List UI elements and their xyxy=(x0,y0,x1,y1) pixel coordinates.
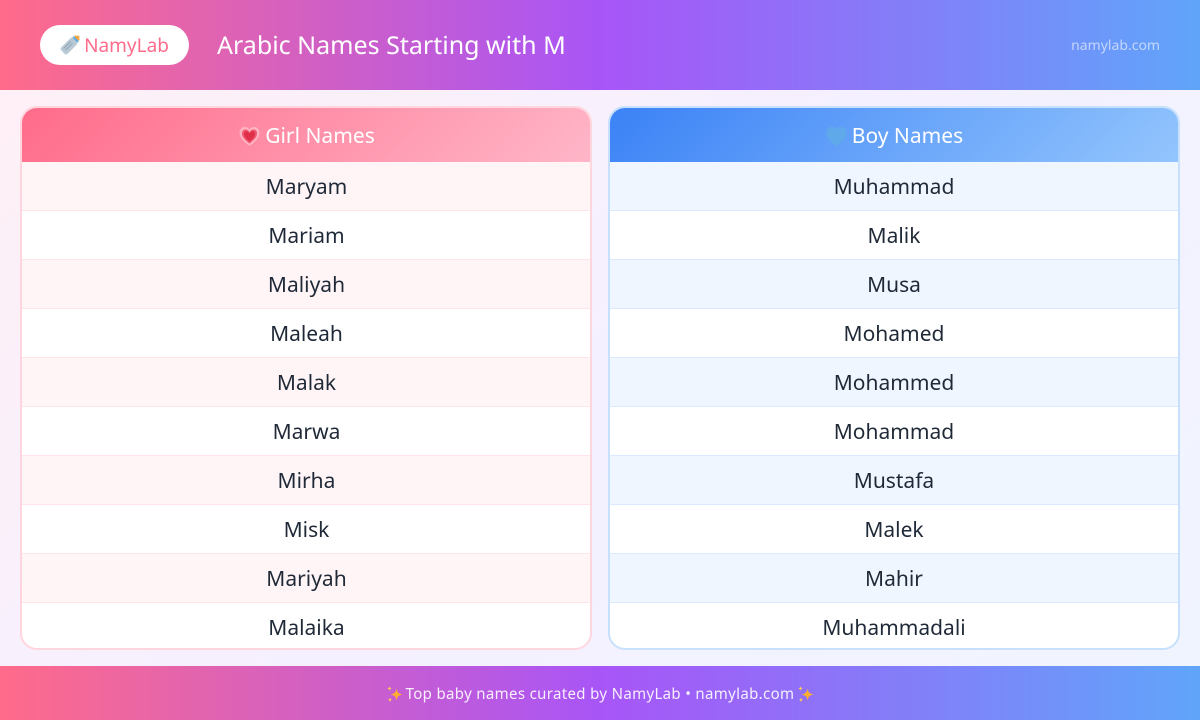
name row: Mariyah xyxy=(22,554,590,603)
name row: Malik: Malik xyxy=(868,222,920,250)
name row: Musa xyxy=(610,260,1178,309)
name row: Mohamed: Mohamed xyxy=(844,320,944,348)
name row: Mohammed xyxy=(610,358,1178,407)
name row: Mustafa xyxy=(610,456,1178,505)
name row: Misk xyxy=(22,505,590,554)
header band xyxy=(0,0,1200,90)
icon: right sparkles xyxy=(798,686,814,702)
logo pill: NamyLab xyxy=(84,32,169,58)
icon: pink heart xyxy=(240,127,260,146)
name row: Mariam xyxy=(22,211,590,260)
name row: Maliyah: Maliyah xyxy=(268,271,345,299)
footer text: Top baby names curated by NamyLab • namylab.com xyxy=(406,684,794,704)
icon: left sparkles xyxy=(387,686,402,702)
name row: Mohammad xyxy=(610,407,1178,456)
girl names heading xyxy=(22,108,590,162)
name row: Mohamed xyxy=(610,309,1178,358)
name row: Mirha: Mirha xyxy=(278,467,335,495)
name row: Maleah: Maleah xyxy=(270,320,343,348)
name row: Muhammad xyxy=(610,162,1178,211)
name row: Musa: Musa xyxy=(867,271,921,299)
name row: Mariam: Mariam xyxy=(268,222,345,250)
name row: Mariyah: Mariyah xyxy=(266,565,347,593)
boy names heading: Boy Names xyxy=(852,122,963,150)
name row: Mohammad: Mohammad xyxy=(834,418,954,446)
icon: blue heart xyxy=(826,127,846,146)
name row: Malak xyxy=(22,358,590,407)
name row: Misk: Misk xyxy=(284,516,329,544)
name row: Maliyah xyxy=(22,260,590,309)
icon: baby bottle xyxy=(60,35,80,54)
panel: girl names xyxy=(20,106,592,650)
name row: Mohammed: Mohammed xyxy=(834,369,954,397)
name row: Mahir xyxy=(610,554,1178,603)
name row: Maryam: Maryam xyxy=(266,173,347,201)
name row: Marwa xyxy=(22,407,590,456)
name row: Maryam xyxy=(22,162,590,211)
boy names heading xyxy=(610,108,1178,162)
name row: Malaika: Malaika xyxy=(268,614,345,642)
footer band xyxy=(0,666,1200,720)
logo pill xyxy=(40,25,189,65)
name row: Maleah xyxy=(22,309,590,358)
name row: Malik xyxy=(610,211,1178,260)
name row: Muhammadali: Muhammadali xyxy=(822,614,966,642)
name row: Marwa: Marwa xyxy=(273,418,340,446)
name row: Malek xyxy=(610,505,1178,554)
site address: namylab.com xyxy=(1071,36,1160,55)
name row: Mahir: Mahir xyxy=(865,565,923,593)
title: Arabic Names Starting with M xyxy=(217,28,566,62)
name row: Malek: Malek xyxy=(864,516,924,544)
panel: boy names xyxy=(608,106,1180,650)
name row: Malak: Malak xyxy=(277,369,336,397)
name row: Muhammad: Muhammad xyxy=(834,173,954,201)
name row: Mirha xyxy=(22,456,590,505)
girl names heading: Girl Names xyxy=(265,122,375,150)
name row: Mustafa: Mustafa xyxy=(854,467,934,495)
